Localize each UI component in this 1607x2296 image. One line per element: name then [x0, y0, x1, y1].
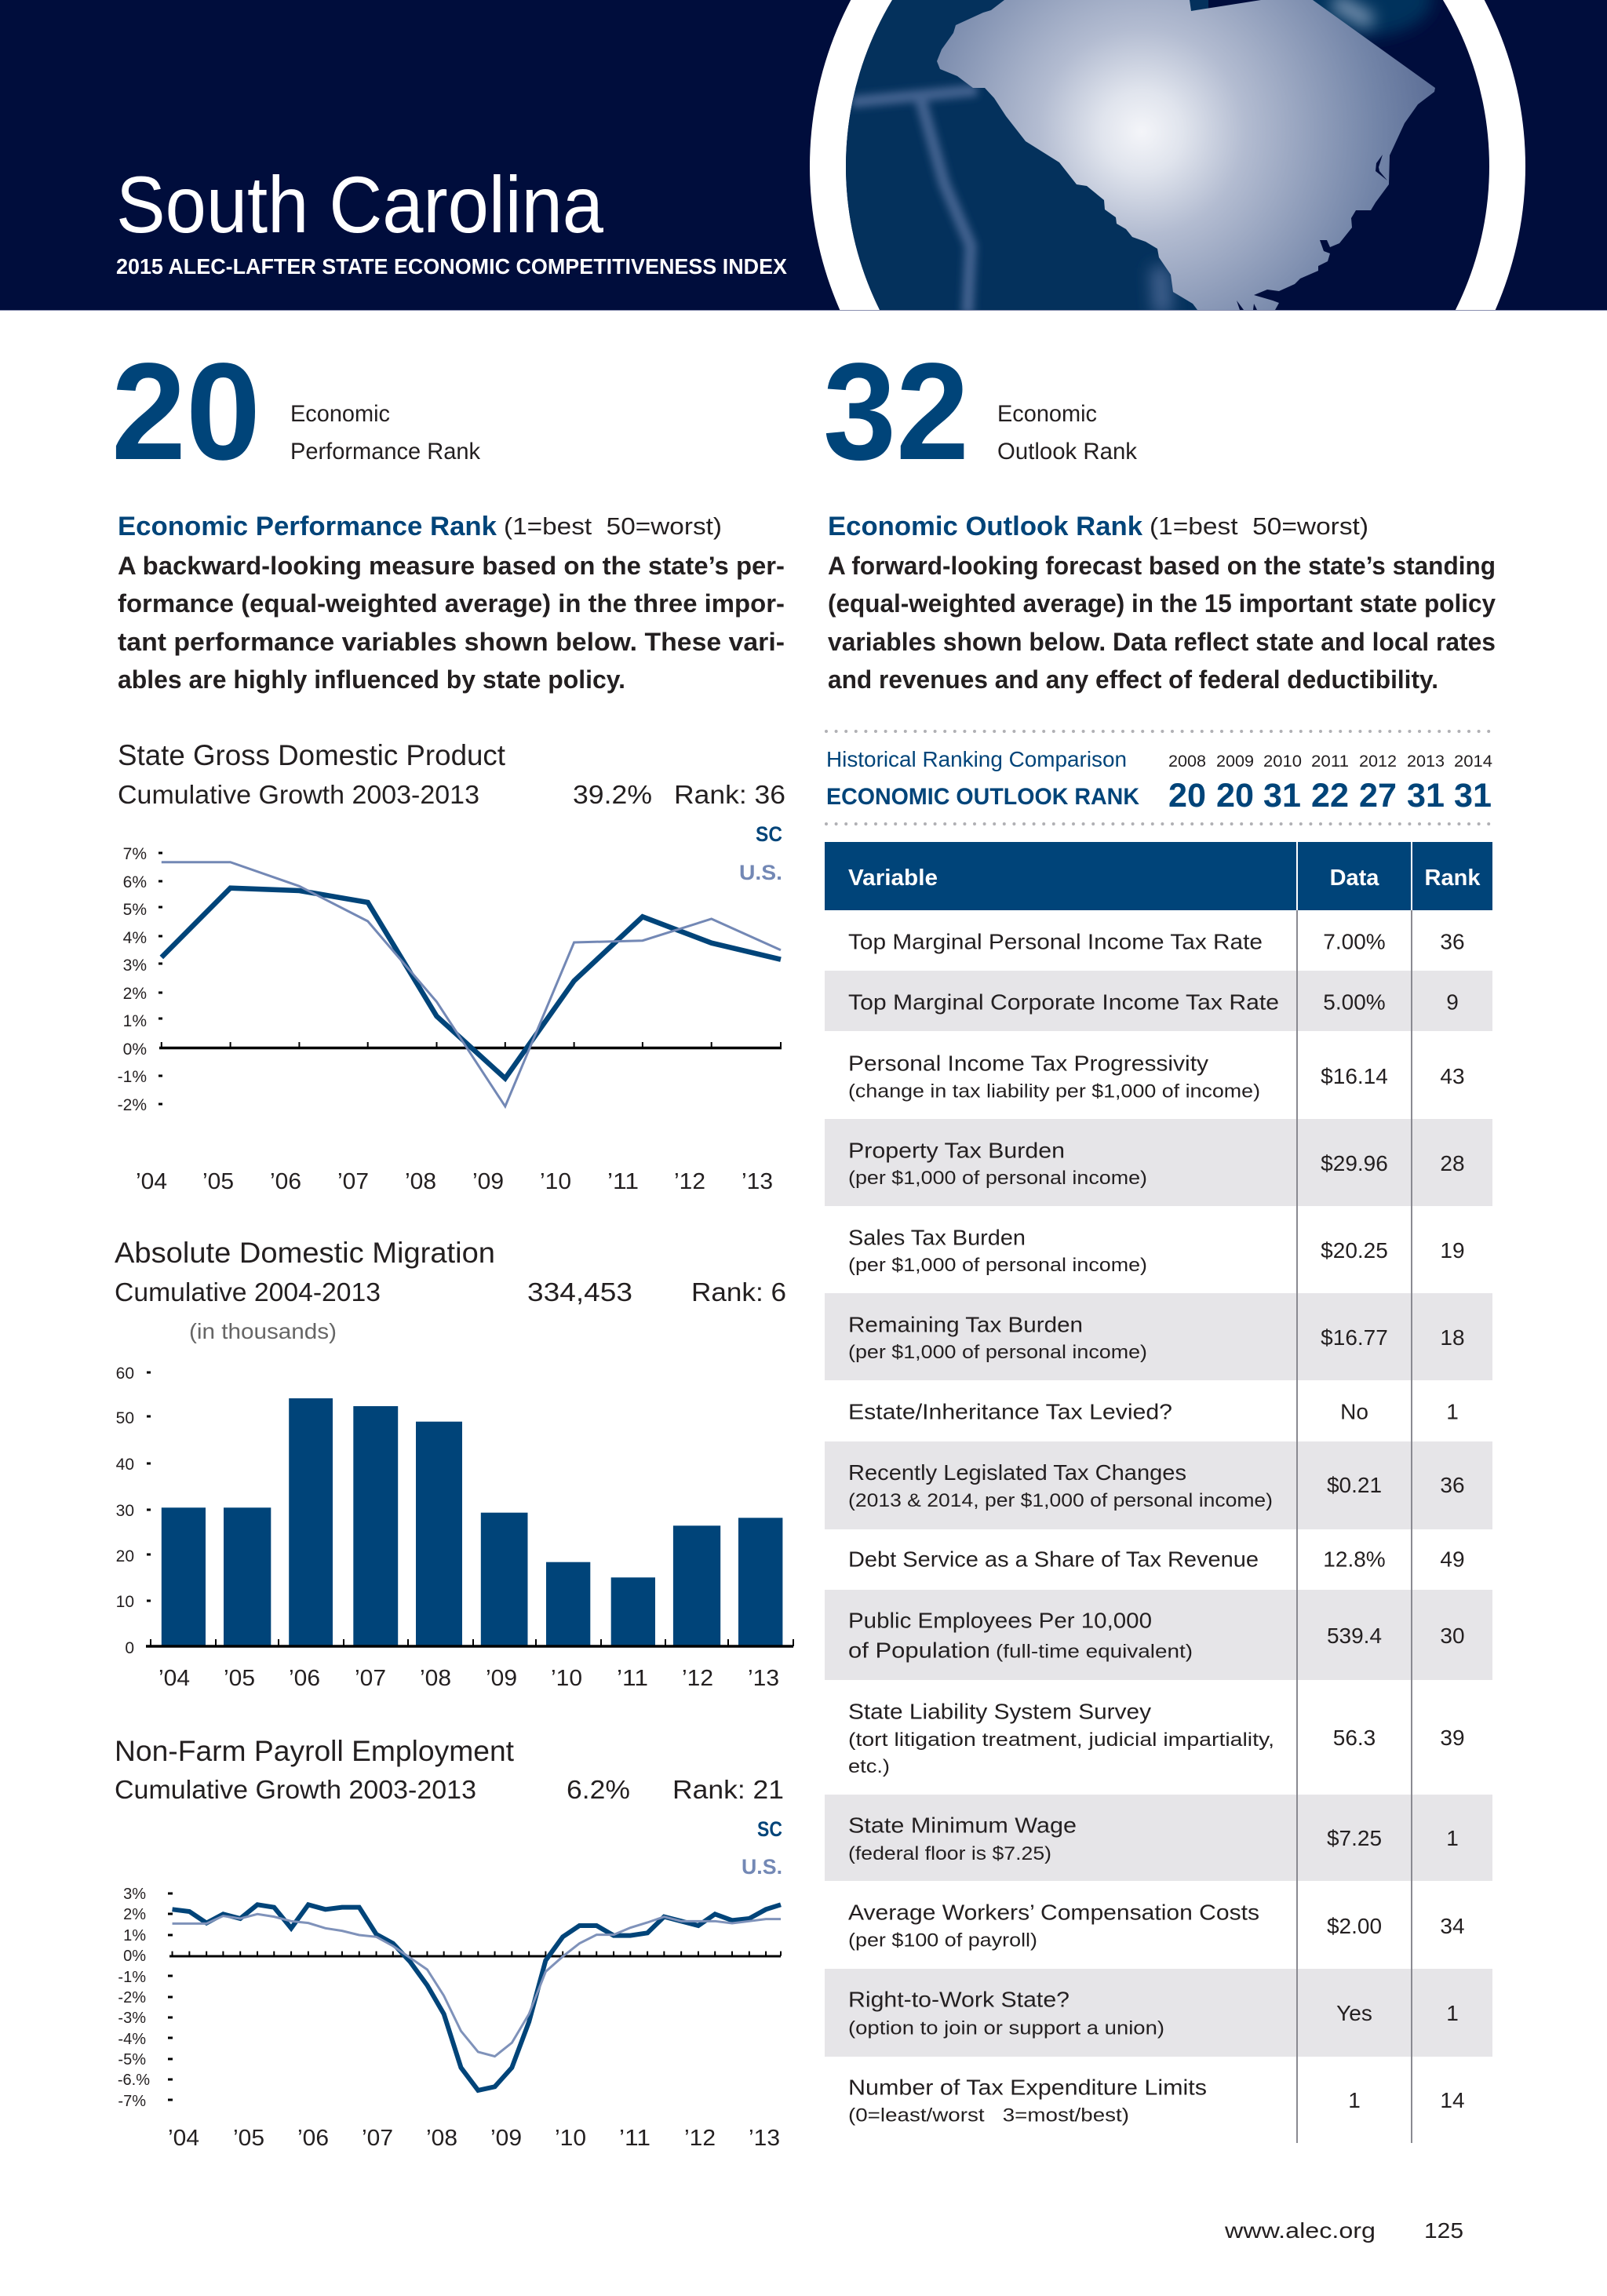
- y axis labels: -4%: [118, 2031, 146, 2048]
- row: debt service: 49: [1440, 1547, 1465, 1571]
- text block: performance description: Economic Performance Rank: [118, 512, 497, 541]
- row: top marginal corporate income tax rate: Top Marginal Corporate Income Tax Rate: [848, 990, 1279, 1014]
- row: public employees: of Population: [848, 1638, 990, 1662]
- row: debt service: 12.8%: [1323, 1547, 1386, 1571]
- y axis labels: 2%: [123, 985, 147, 1003]
- row: remaining tax burden: 18: [1440, 1325, 1465, 1350]
- chart: absolute domestic migration: (in thousands): [189, 1319, 337, 1343]
- row: progressivity: [848, 1051, 1465, 1102]
- y axis labels: 1%: [123, 1012, 147, 1030]
- x axis labels: ’07: [362, 2126, 393, 2151]
- chart: state gross domestic product: 39.2%: [573, 780, 652, 809]
- chart: state gross domestic product: Rank: 36: [674, 780, 785, 809]
- table header: Rank: [1425, 866, 1481, 891]
- historical ranks: 20: [1216, 777, 1254, 815]
- icon: globe with South Carolina map: [810, 0, 1525, 310]
- row: progressivity: Personal Income Tax Progressivity: [848, 1051, 1208, 1075]
- row: workers compensation: $2.00: [1327, 1914, 1382, 1938]
- text block: outlook description: (equal-weighted average) in the 15 important state policy: [828, 589, 1496, 618]
- y axis labels: 50: [116, 1409, 134, 1427]
- y axis labels: -1%: [118, 1068, 147, 1086]
- row: property tax burden: 28: [1440, 1151, 1465, 1175]
- chart: state gross domestic product: [118, 739, 785, 1194]
- x axis labels: ’05: [224, 1666, 255, 1691]
- text block: performance description: ables are highly influenced by state policy.: [118, 665, 625, 694]
- row: top marginal personal income tax rate: [848, 929, 1465, 954]
- row: state liability system survey: [848, 1700, 1465, 1777]
- y axis labels: 6%: [123, 873, 147, 891]
- row: remaining tax burden: Remaining Tax Burden: [848, 1312, 1083, 1337]
- text block: performance description: A backward-looking measure based on the state’s per-: [118, 552, 785, 580]
- row: sales tax burden: $20.25: [1321, 1238, 1388, 1263]
- subtitle: 2015 ALEC-LAFTER STATE ECONOMIC COMPETITIVENESS INDEX: [116, 254, 787, 279]
- x axis labels: ’12: [674, 1169, 705, 1194]
- y axis labels: 20: [116, 1547, 134, 1565]
- row: state liability system survey: (tort litigation treatment, judicial impartiality,: [848, 1729, 1274, 1751]
- historical ranks: 31: [1454, 777, 1492, 815]
- x axis labels: ’10: [551, 1666, 582, 1691]
- economic performance rank number: 20: [111, 335, 261, 489]
- text block: performance description: formance (equal-weighted average) in the three impor-: [118, 589, 785, 618]
- row: property tax burden: (per $1,000 of personal income): [848, 1168, 1147, 1189]
- panel: historical ranking comparison: [826, 731, 1492, 824]
- row: state minimum wage: $7.25: [1327, 1826, 1382, 1850]
- legend: SC: [756, 822, 782, 846]
- y axis labels: 0: [125, 1639, 134, 1657]
- x axis labels: ’12: [682, 1666, 713, 1691]
- chart: absolute domestic migration: Rank: 6: [691, 1277, 786, 1307]
- panel: historical ranking comparison: ECONOMIC OUTLOOK RANK: [826, 784, 1139, 810]
- chart: state gross domestic product: State Gross Domestic Product: [118, 739, 506, 771]
- x axis labels: ’04: [168, 2126, 199, 2151]
- x axis labels: ’11: [617, 1666, 648, 1691]
- rank label: [997, 401, 1138, 465]
- row: estate tax: Estate/Inheritance Tax Levied?: [848, 1400, 1172, 1423]
- chart: state gross domestic product: Cumulative Growth 2003-2013: [118, 780, 479, 809]
- x axis labels: ’05: [233, 2126, 264, 2151]
- x axis labels: ’04: [159, 1666, 190, 1691]
- row: debt service: [848, 1547, 1465, 1571]
- text block: performance description: tant performance variables shown below. These vari-: [118, 628, 785, 656]
- y axis labels: 3%: [123, 1886, 146, 1903]
- row: state liability system survey: 56.3: [1333, 1726, 1376, 1750]
- y axis labels: [118, 845, 147, 1114]
- years: 2013: [1407, 753, 1445, 771]
- row: tax expenditure limits: (0=least/worst 3=most/best): [848, 2105, 1129, 2127]
- x axis labels: [159, 1666, 779, 1691]
- row: public employees: [848, 1609, 1465, 1662]
- x axis labels: ’07: [355, 1666, 386, 1691]
- row: tax expenditure limits: 1: [1348, 2088, 1361, 2112]
- table header: Variable: [848, 866, 938, 891]
- table header: Data: [1330, 866, 1379, 891]
- y axis labels: -1%: [118, 1969, 146, 1986]
- legend: U.S.: [742, 1855, 782, 1879]
- row: sales tax burden: [848, 1226, 1465, 1276]
- legend: SC: [757, 1817, 782, 1841]
- y axis labels: 4%: [123, 929, 147, 947]
- x axis labels: [168, 2126, 780, 2151]
- x axis labels: ’05: [202, 1169, 234, 1194]
- row: remaining tax burden: $16.77: [1321, 1325, 1388, 1350]
- years: 2010: [1263, 753, 1302, 771]
- y axis labels: -7%: [118, 2093, 146, 2110]
- line: SC: [162, 888, 781, 1078]
- row: public employees: 30: [1440, 1624, 1465, 1648]
- years: [1168, 753, 1492, 771]
- row: right to work: Right-to-Work State?: [848, 1987, 1070, 2012]
- row: right to work: [848, 1987, 1459, 2039]
- row: recently legislated tax changes: (2013 & 2014, per $1,000 of personal income): [848, 1490, 1273, 1511]
- row: tax expenditure limits: Number of Tax Expenditure Limits: [848, 2075, 1207, 2100]
- rank label: Performance Rank: [290, 439, 481, 465]
- row: top marginal corporate income tax rate: [848, 990, 1459, 1014]
- y axis labels: 60: [116, 1365, 134, 1383]
- text block: outlook description: Economic Outlook Rank: [828, 512, 1142, 541]
- line: SC: [173, 1904, 781, 2090]
- y axis labels: 7%: [123, 845, 147, 863]
- y axis labels: -3%: [118, 2010, 146, 2027]
- x axis labels: ’04: [136, 1169, 167, 1194]
- years: 2008: [1168, 753, 1206, 771]
- row: state liability system survey: State Liability System Survey: [848, 1700, 1151, 1723]
- y axis labels: [116, 1365, 134, 1657]
- row: recently legislated tax changes: $0.21: [1327, 1473, 1382, 1497]
- row: public employees: Public Employees Per 10,000: [848, 1609, 1152, 1632]
- row: progressivity: 43: [1440, 1064, 1465, 1088]
- x axis labels: ’13: [742, 1169, 773, 1194]
- row: sales tax burden: Sales Tax Burden: [848, 1226, 1026, 1249]
- bars: [162, 1398, 782, 1645]
- legend: U.S.: [739, 861, 782, 884]
- chart: non-farm payroll employment: 6.2%: [567, 1775, 630, 1804]
- row: estate tax: 1: [1446, 1400, 1459, 1423]
- legend: [742, 1817, 782, 1879]
- economic outlook rank number: [823, 335, 1138, 489]
- y axis labels: -2%: [118, 1096, 147, 1114]
- chart: absolute domestic migration: [115, 1237, 793, 1691]
- title: South Carolina: [116, 160, 603, 250]
- text block: performance description: (1=best 50=worst): [504, 512, 722, 540]
- y axis labels: 2%: [123, 1906, 146, 1923]
- row: estate tax: No: [1340, 1400, 1368, 1423]
- line: U.S.: [173, 1914, 781, 2057]
- line: U.S.: [162, 862, 781, 1106]
- y axis labels: 0%: [123, 1040, 147, 1059]
- row: remaining tax burden: (per $1,000 of personal income): [848, 1342, 1147, 1363]
- row: sales tax burden: (per $1,000 of personal income): [848, 1255, 1147, 1276]
- footer: [1224, 2218, 1463, 2243]
- chart: non-farm payroll employment: [115, 1735, 784, 2151]
- row: top marginal personal income tax rate: 7.00%: [1323, 929, 1386, 954]
- y axis labels: 5%: [123, 901, 147, 919]
- row: state minimum wage: (federal floor is $7.25): [848, 1843, 1051, 1864]
- y axis labels: 1%: [123, 1927, 146, 1944]
- x axis labels: ’09: [490, 2126, 522, 2151]
- row: top marginal personal income tax rate: Top Marginal Personal Income Tax Rate: [848, 929, 1263, 954]
- y axis labels: 30: [116, 1502, 134, 1520]
- years: 2009: [1216, 753, 1254, 771]
- x axis labels: ’06: [297, 2126, 329, 2151]
- chart: absolute domestic migration: 334,453: [527, 1277, 632, 1307]
- x axis labels: ’10: [555, 2126, 586, 2151]
- y axis labels: 40: [116, 1456, 134, 1474]
- x axis labels: ’06: [289, 1666, 320, 1691]
- row: public employees: 539.4: [1327, 1624, 1382, 1648]
- y axis labels: -5%: [118, 2051, 146, 2068]
- row: top marginal corporate income tax rate: 5.00%: [1323, 990, 1386, 1014]
- row: state minimum wage: [848, 1813, 1459, 1864]
- chart: absolute domestic migration: Absolute Domestic Migration: [115, 1237, 495, 1269]
- text block: outlook description: variables shown below. Data reflect state and local rates: [828, 628, 1496, 656]
- x axis labels: ’12: [684, 2126, 716, 2151]
- text block: outlook description: and revenues and any effect of federal deductibility.: [828, 665, 1438, 694]
- historical ranks: 22: [1311, 777, 1349, 815]
- row: state minimum wage: 1: [1446, 1826, 1459, 1850]
- x axis labels: ’09: [472, 1169, 504, 1194]
- chart: non-farm payroll employment: Non-Farm Payroll Employment: [115, 1735, 515, 1767]
- x axis labels: ’08: [405, 1169, 436, 1194]
- row: recently legislated tax changes: Recently Legislated Tax Changes: [848, 1460, 1186, 1485]
- header banner: [0, 0, 1607, 311]
- row: recently legislated tax changes: 36: [1440, 1473, 1465, 1497]
- rank label: Economic: [997, 401, 1097, 427]
- x axis labels: ’09: [486, 1666, 517, 1691]
- row: progressivity: (change in tax liability per $1,000 of income): [848, 1081, 1260, 1102]
- historical ranks: 31: [1263, 777, 1301, 815]
- y axis labels: [118, 1886, 150, 2110]
- row: state minimum wage: State Minimum Wage: [848, 1813, 1077, 1838]
- row: workers compensation: 34: [1440, 1914, 1465, 1938]
- historical ranks: 27: [1359, 777, 1397, 815]
- x axis labels: ’08: [420, 1666, 451, 1691]
- footer: 125: [1424, 2218, 1463, 2243]
- rank label: [290, 401, 481, 465]
- row: state liability system survey: 39: [1440, 1726, 1465, 1750]
- x axis labels: [136, 1169, 773, 1194]
- row: workers compensation: [848, 1901, 1465, 1951]
- row: sales tax burden: 19: [1440, 1238, 1465, 1263]
- x axis labels: ’07: [337, 1169, 369, 1194]
- x axis labels: ’06: [270, 1169, 301, 1194]
- text block: performance description: [118, 512, 785, 694]
- row: progressivity: $16.14: [1321, 1064, 1388, 1088]
- row: state liability system survey: etc.): [848, 1756, 890, 1777]
- y axis labels: -2%: [118, 1989, 146, 2006]
- row: top marginal personal income tax rate: 36: [1440, 929, 1465, 954]
- row: property tax burden: [848, 1138, 1465, 1189]
- x axis labels: ’08: [426, 2126, 457, 2151]
- row: right to work: Yes: [1336, 2001, 1372, 2025]
- row: right to work: (option to join or support a union): [848, 2018, 1164, 2039]
- row: property tax burden: $29.96: [1321, 1151, 1388, 1175]
- economic performance rank number: [111, 335, 481, 489]
- y axis labels: 3%: [123, 957, 147, 975]
- text block: outlook description: A forward-looking forecast based on the state’s standing: [828, 552, 1496, 580]
- row: workers compensation: (per $100 of payroll): [848, 1930, 1037, 1951]
- historical ranks: 31: [1407, 777, 1445, 815]
- table: outlook variables: [825, 842, 1492, 2143]
- y axis labels: -6.%: [118, 2072, 150, 2089]
- row: right to work: 1: [1446, 2001, 1459, 2025]
- historical ranks: 20: [1168, 777, 1206, 815]
- chart: non-farm payroll employment: Cumulative Growth 2003-2013: [115, 1775, 476, 1804]
- panel: historical ranking comparison: Historical Ranking Comparison: [826, 747, 1127, 771]
- footer: www.alec.org: [1224, 2218, 1376, 2243]
- years: 2012: [1359, 753, 1397, 771]
- x axis labels: ’11: [607, 1169, 639, 1194]
- text block: outlook description: (1=best 50=worst): [1150, 512, 1368, 540]
- x axis labels: ’11: [619, 2126, 650, 2151]
- row: debt service: Debt Service as a Share of Tax Revenue: [848, 1547, 1259, 1571]
- historical ranks: [1168, 777, 1492, 815]
- legend: [739, 822, 782, 884]
- chart: non-farm payroll employment: Rank: 21: [672, 1775, 784, 1804]
- row: estate tax: [848, 1400, 1459, 1423]
- row: recently legislated tax changes: [848, 1460, 1465, 1511]
- text block: outlook description: [828, 512, 1496, 694]
- x axis labels: ’13: [749, 2126, 780, 2151]
- row: property tax burden: Property Tax Burden: [848, 1138, 1065, 1163]
- years: 2011: [1311, 753, 1349, 771]
- economic outlook rank number: 32: [823, 335, 969, 489]
- row: remaining tax burden: [848, 1312, 1465, 1363]
- row: public employees: (full-time equivalent): [996, 1642, 1193, 1662]
- x axis labels: ’13: [748, 1666, 779, 1691]
- table header: [825, 842, 1492, 910]
- x axis labels: ’10: [540, 1169, 571, 1194]
- chart: absolute domestic migration: Cumulative 2004-2013: [115, 1277, 381, 1307]
- y axis labels: 10: [116, 1593, 134, 1611]
- rank label: Outlook Rank: [997, 439, 1138, 465]
- rank label: Economic: [290, 401, 390, 427]
- row: top marginal corporate income tax rate: 9: [1446, 990, 1459, 1014]
- row: workers compensation: Average Workers’ Compensation Costs: [848, 1901, 1259, 1924]
- y axis labels: 0%: [123, 1948, 146, 1965]
- row: tax expenditure limits: 14: [1440, 2088, 1465, 2112]
- row: tax expenditure limits: [848, 2075, 1465, 2127]
- years: 2014: [1454, 753, 1492, 771]
